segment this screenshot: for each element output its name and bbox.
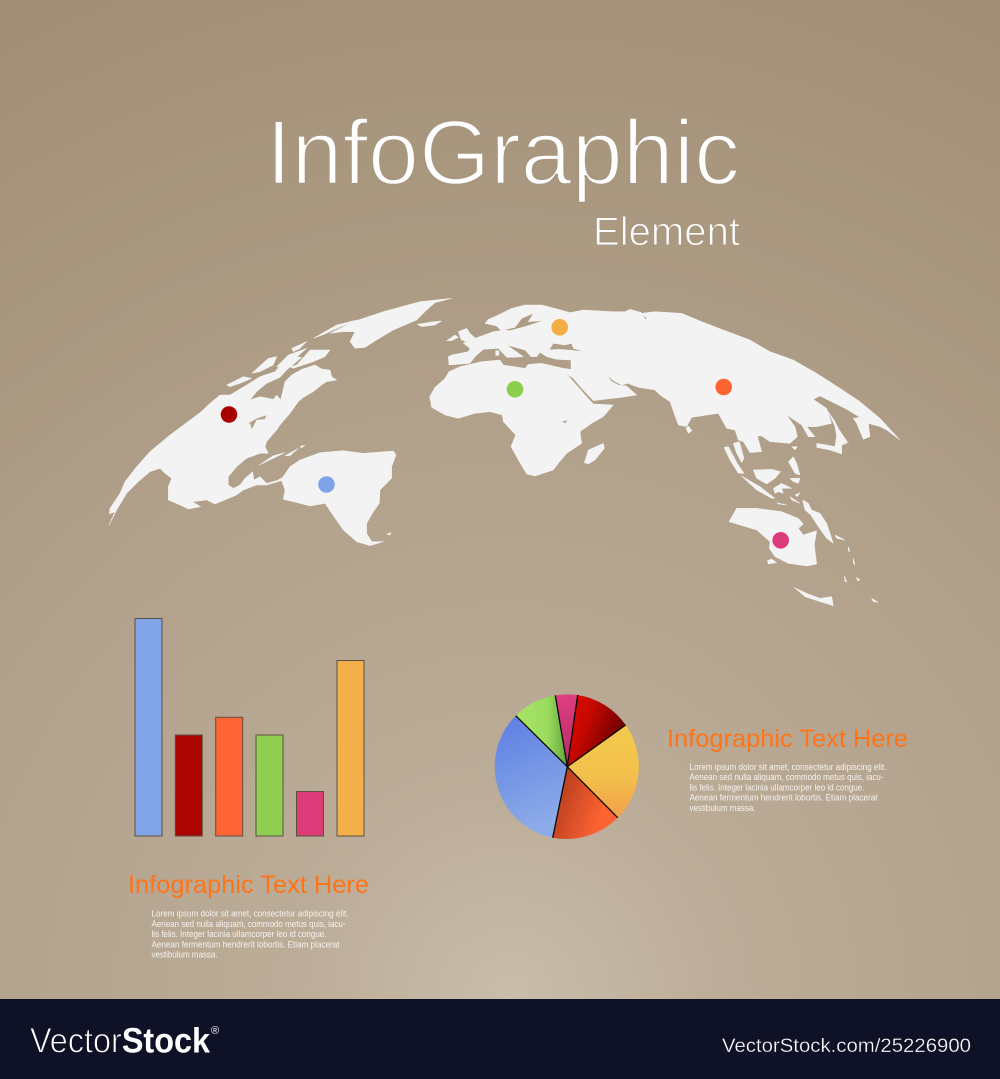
slice: orange [553,767,618,839]
footer logo: VectorStock [30,1022,210,1060]
slice: red [567,695,626,767]
slice: pink [555,694,578,767]
americas [109,298,452,546]
bar chart [135,618,364,836]
pie chart [495,694,639,839]
left body text: Aenean sed nulla aliquam, commodo metus quis, iacu- [152,919,346,929]
marker: north america [221,406,237,423]
right body text: Aenean fermentum hendrerit lobortis. Etiam placerat [690,793,878,803]
marker: australia [772,532,789,549]
right body text: Aenean sed nulla aliquam, commodo metus quis, iacu- [690,772,884,782]
right body text [690,762,886,813]
oceania [729,500,878,606]
marker: europe [551,319,568,336]
left body text: vestibulum massa. [152,950,218,960]
left body text: Lorem ipsum dolor sit amet, consectetur adipiscing elit. [152,908,348,918]
footer url: VectorStock.com/25226900 [722,1036,971,1057]
title: InfoGraphic [266,102,740,204]
bar: pink [296,792,324,836]
right body text: Lorem ipsum dolor sit amet, consectetur adipiscing elit. [690,762,886,772]
marker: africa [507,381,523,398]
footer bar [0,999,1000,1079]
africa and eurasia [430,305,900,476]
subtitle: Element [593,210,740,254]
left body text: Aenean fermentum hendrerit lobortis. Etiam placerat [152,939,340,949]
bar: orange [216,717,243,836]
registered mark: ® [211,1025,219,1037]
right body text: vestibulum massa. [690,803,756,813]
bar: yellow [337,660,364,836]
marker: asia [715,379,732,395]
slice: blue [495,716,567,838]
world map [109,298,900,606]
bar: blue [135,618,162,836]
right heading: Infographic Text Here [667,725,908,753]
right body text: lis felis. Integer lacinia ullamcorper leo id congue. [690,782,864,792]
bar: dark red [175,735,202,836]
slice: green [516,695,567,767]
bar: green [256,735,283,836]
left body text [152,908,348,960]
southeast asia islands [686,412,848,505]
left heading: Infographic Text Here [128,871,369,899]
slice: yellow [567,725,639,818]
marker: south america [318,476,335,493]
left body text: lis felis. Integer lacinia ullamcorper leo id congue. [152,929,326,939]
